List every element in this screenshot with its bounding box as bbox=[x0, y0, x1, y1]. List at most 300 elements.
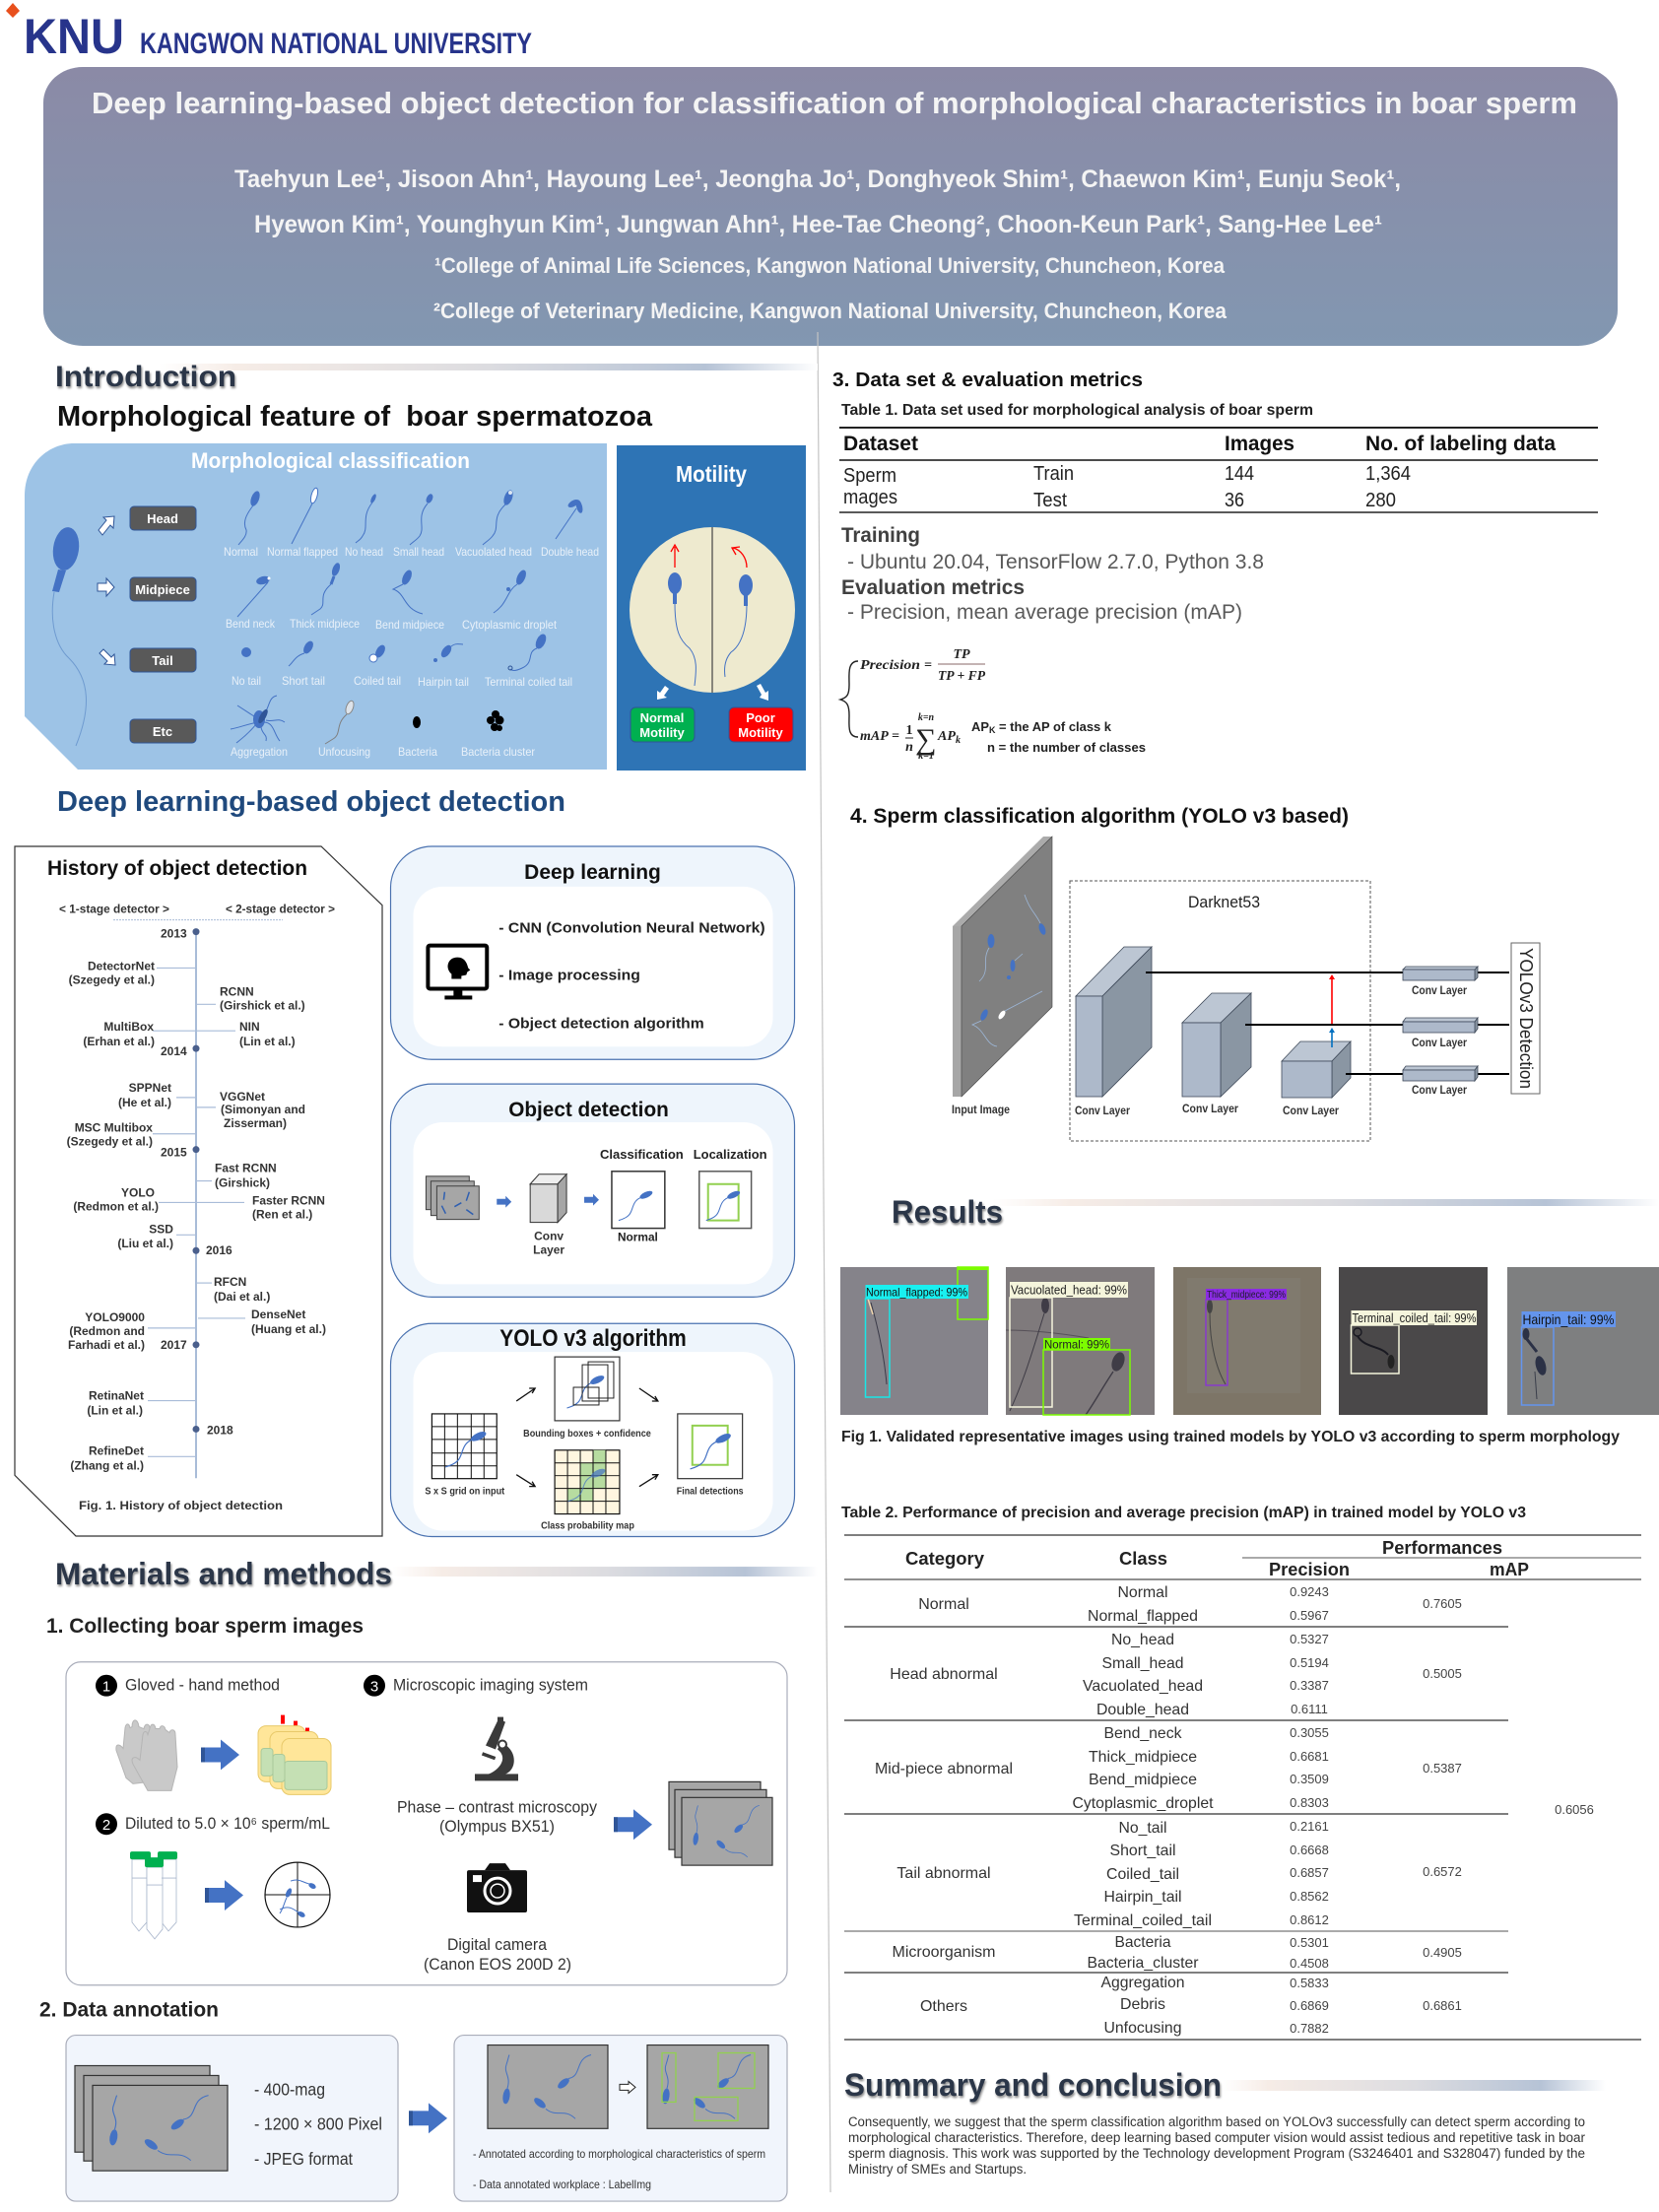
logo: Kangwon National University: KANGWON NATIONAL UNIVERSITY bbox=[140, 28, 532, 60]
class column: Vacuolated_head bbox=[1083, 1678, 1203, 1695]
class probability map bbox=[541, 1450, 634, 1531]
precision column: 0.8303 bbox=[1290, 1795, 1329, 1810]
grid on input bbox=[425, 1414, 505, 1498]
normal motility badge: Normal bbox=[640, 710, 684, 725]
image specs: - JPEG format bbox=[254, 2149, 353, 2169]
precision column bbox=[1290, 1584, 1329, 2036]
category column: Microorganism bbox=[893, 1944, 995, 1961]
affiliations bbox=[433, 253, 1228, 323]
mAP column: 0.5387 bbox=[1423, 1761, 1462, 1776]
formula: ∑ bbox=[915, 723, 936, 756]
training and evaluation text: - Ubuntu 20.04, TensorFlow 2.7.0, Python 3.8 bbox=[847, 551, 1264, 573]
etc labels: Aggregation bbox=[231, 745, 288, 759]
table 1: Images bbox=[1225, 433, 1294, 455]
step 2 label: Diluted to 5.0 × 10⁶ sperm/mL bbox=[125, 1814, 330, 1833]
conv layer labels: Conv Layer bbox=[1412, 983, 1467, 997]
authors: Taehyun Lee¹, Jisoon Ahn¹, Hayoung Lee¹, Jeongha Jo¹, Donghyeok Shim¹, Chaewon Kim¹, Eunju Seok¹, bbox=[234, 166, 1401, 193]
icon: conv cube bbox=[530, 1174, 566, 1223]
panel: image format bbox=[66, 2036, 398, 2201]
class column: Bend_neck bbox=[1103, 1725, 1182, 1742]
timeline entries: 1-stage: (Erhan et al.) bbox=[83, 1035, 155, 1048]
poor motility badge: Poor bbox=[746, 710, 775, 725]
etc labels: Bacteria cluster bbox=[461, 745, 535, 759]
tail labels: Hairpin tail bbox=[418, 675, 469, 689]
step 3 label: Microscopic imaging system bbox=[393, 1676, 588, 1695]
precision column: 0.6857 bbox=[1290, 1865, 1329, 1880]
precision column: 0.5301 bbox=[1290, 1935, 1329, 1950]
precision column: 0.3387 bbox=[1290, 1678, 1329, 1693]
table 1: No. of labeling data bbox=[1365, 433, 1556, 455]
timeline entries: 2-stage: NIN bbox=[239, 1020, 260, 1034]
summary text: sperm diagnosis. This work was supported by the Technology development Program (S3246401 and S328047) funded by the bbox=[848, 2146, 1585, 2161]
precision column: 0.8562 bbox=[1290, 1889, 1329, 1904]
table header: Category bbox=[905, 1549, 984, 1569]
timeline entries: 1-stage: (Redmon et al.) bbox=[73, 1199, 159, 1213]
normal motility badge bbox=[630, 707, 695, 742]
logo: Kangwon National University: KNU bbox=[24, 9, 124, 64]
poor motility badge: Motility bbox=[738, 725, 784, 740]
precision column: 0.8612 bbox=[1290, 1912, 1329, 1927]
panel: deep learning bbox=[391, 846, 795, 1059]
formula: K bbox=[989, 725, 996, 735]
midpiece morphologies bbox=[237, 562, 528, 617]
timeline entries: 1-stage: SPPNet bbox=[129, 1081, 171, 1095]
category labels: Etc bbox=[153, 724, 172, 739]
table 1 caption: Table 1. Data set used for morphological analysis of boar sperm bbox=[841, 402, 1313, 419]
class column: Normal bbox=[1117, 1584, 1168, 1601]
timeline entries: 2-stage: VGGNet bbox=[220, 1090, 265, 1104]
title panel bbox=[43, 67, 1618, 346]
labels: Classification bbox=[600, 1147, 684, 1162]
timeline entries: 2-stage: (Girshick et al.) bbox=[220, 998, 305, 1012]
timeline entries: 2-stage: (Simonyan and bbox=[221, 1103, 305, 1116]
midpiece labels: Bend midpiece bbox=[375, 618, 444, 632]
head labels: Double head bbox=[541, 545, 599, 559]
formula: k bbox=[956, 735, 961, 746]
stage labels: < 1-stage detector > bbox=[59, 903, 169, 916]
figure 1 caption: Fig 1. Validated representative images using trained models by YOLO v3 according to sperm morphology bbox=[841, 1429, 1620, 1445]
arrow bbox=[205, 1880, 243, 1910]
tail labels: No tail bbox=[232, 674, 261, 688]
step 1 label: 1 bbox=[102, 1679, 110, 1696]
step 1 label bbox=[96, 1675, 280, 1697]
table 2 bbox=[844, 1535, 1641, 2040]
mAP column: 0.5005 bbox=[1423, 1666, 1462, 1681]
result image: hairpin tail: Hairpin_tail: 99% bbox=[1523, 1311, 1614, 1327]
timeline axis: 2013 bbox=[161, 927, 187, 941]
mAP column: 0.6056 bbox=[1555, 1802, 1594, 1817]
panel title: Motility bbox=[676, 461, 747, 487]
icon: semen bags bbox=[258, 1715, 331, 1794]
panel: object detection bbox=[391, 1084, 795, 1297]
output blocks bbox=[1403, 967, 1478, 1081]
heading: Results: Results bbox=[892, 1194, 1003, 1230]
summary text: Ministry of SMEs and Startups. bbox=[848, 2162, 1027, 2177]
formula: AP bbox=[971, 719, 989, 734]
training and evaluation text: Evaluation metrics bbox=[841, 576, 1025, 599]
category labels: Head bbox=[147, 511, 178, 526]
head labels: Normal bbox=[224, 545, 258, 559]
etc labels bbox=[231, 745, 535, 759]
bullet list bbox=[498, 920, 765, 1032]
formula: n bbox=[905, 740, 913, 755]
panel: collecting boar sperm images bbox=[66, 1662, 787, 1985]
midpiece labels: Cytoplasmic droplet bbox=[462, 618, 558, 632]
authors: Hyewon Kim¹, Younghyun Kim¹, Jungwan Ahn¹, Hee-Tae Cheong², Choon-Keun Park¹, Sang-Hee Lee¹ bbox=[254, 211, 1382, 238]
diagram: YOLO v3 architecture bbox=[952, 837, 1540, 1141]
timeline entries: 1-stage: SSD bbox=[149, 1222, 173, 1236]
class column: Bacteria bbox=[1115, 1934, 1171, 1951]
precision column: 0.3509 bbox=[1290, 1772, 1329, 1786]
timeline entries: 2-stage bbox=[214, 984, 326, 1336]
label: conv layer: Conv bbox=[534, 1230, 564, 1243]
timeline entries: 2-stage: (Dai et al.) bbox=[214, 1290, 270, 1304]
precision column: 0.5194 bbox=[1290, 1655, 1329, 1670]
arrow bbox=[584, 1194, 599, 1206]
icon: tubes bbox=[130, 1851, 177, 1939]
timeline axis: 2014 bbox=[161, 1044, 187, 1058]
table 1 bbox=[839, 428, 1598, 512]
class column: Bacteria_cluster bbox=[1088, 1955, 1199, 1972]
final detections: Final detections bbox=[677, 1487, 744, 1498]
step 1 label: Gloved - hand method bbox=[125, 1676, 280, 1695]
result image: vacuolated head: Vacuolated_head: 99% bbox=[1011, 1283, 1127, 1297]
detection box bbox=[1511, 943, 1540, 1094]
summary text bbox=[848, 2114, 1586, 2177]
class column: Bend_midpiece bbox=[1089, 1772, 1197, 1788]
grid on input: S x S grid on input bbox=[425, 1487, 505, 1498]
image stack bbox=[426, 1176, 479, 1220]
stage labels: < 2-stage detector > bbox=[226, 903, 335, 916]
arrow bbox=[497, 1196, 511, 1208]
raw image bbox=[488, 2045, 608, 2128]
timeline axis: 2015 bbox=[161, 1146, 187, 1160]
panel title: YOLO v3 algorithm bbox=[499, 1325, 687, 1352]
precision column: 0.9243 bbox=[1290, 1584, 1329, 1599]
icon: gloves bbox=[116, 1720, 177, 1790]
table 1: 1,364 bbox=[1365, 463, 1411, 485]
heading: Materials and methods: Materials and methods bbox=[55, 1556, 392, 1591]
timeline entries: 1-stage: MSC Multibox bbox=[75, 1121, 153, 1135]
timeline entries: 1-stage: MultiBox bbox=[103, 1020, 154, 1034]
precision column: 0.6681 bbox=[1290, 1749, 1329, 1764]
title: Deep learning-based object detection for classification of morphological characteristics in boar sperm bbox=[92, 86, 1577, 120]
formula: TP + FP bbox=[938, 669, 985, 684]
formula: TP bbox=[953, 647, 970, 662]
category column bbox=[875, 1596, 1013, 2015]
timeline axis: 2016 bbox=[206, 1243, 232, 1257]
flow arrows bbox=[516, 1388, 658, 1487]
timeline entries: 1-stage: YOLO9000 bbox=[85, 1310, 145, 1324]
annotation notes: - Data annotated workplace : LabelImg bbox=[473, 2178, 651, 2191]
input image plate: Input Image bbox=[952, 1103, 1010, 1116]
class column: No_tail bbox=[1119, 1820, 1166, 1837]
arrow bbox=[614, 1809, 652, 1840]
result image: normal flapped: Normal_flapped: 99% bbox=[866, 1285, 967, 1299]
subheading: collecting images: 1. Collecting boar sperm images bbox=[46, 1615, 364, 1638]
table 2 caption: Table 2. Performance of precision and average precision (mAP) in trained model by YOLO v3 bbox=[841, 1505, 1526, 1521]
mAP column: 0.7605 bbox=[1423, 1596, 1462, 1611]
detection box: YOLOv3 Detection bbox=[1516, 948, 1536, 1089]
formula: mAP bbox=[860, 729, 889, 744]
timeline entries: 2-stage: RCNN bbox=[220, 984, 254, 998]
etc labels: Unfocusing bbox=[318, 745, 370, 759]
darknet53 box bbox=[1070, 881, 1370, 1141]
bounding boxes bbox=[523, 1357, 651, 1440]
precision column: 0.5967 bbox=[1290, 1608, 1329, 1623]
authors bbox=[234, 166, 1401, 238]
class column: Terminal_coiled_tail bbox=[1074, 1912, 1212, 1929]
subheading: sperm classification algorithm: 4. Sperm classification algorithm (YOLO v3 based) bbox=[850, 805, 1349, 828]
image specs: - 400-mag bbox=[254, 2079, 325, 2099]
category column: Head abnormal bbox=[890, 1666, 998, 1683]
poor motility badge bbox=[729, 707, 793, 742]
training and evaluation text: Training bbox=[841, 524, 920, 547]
conv layer labels: Conv Layer bbox=[1412, 1036, 1467, 1049]
mAP column bbox=[1423, 1596, 1594, 2013]
mAP column: 0.4905 bbox=[1423, 1945, 1462, 1960]
precision column: 0.2161 bbox=[1290, 1819, 1329, 1834]
head labels: Vacuolated head bbox=[455, 545, 532, 559]
table 1: Train bbox=[1033, 463, 1074, 485]
midpiece labels: Thick midpiece bbox=[290, 617, 360, 631]
class column: Unfocusing bbox=[1103, 2020, 1182, 2037]
timeline entries: 1-stage: (Zhang et al.) bbox=[70, 1458, 144, 1472]
category labels: Tail bbox=[152, 653, 173, 668]
head labels: Small head bbox=[393, 545, 444, 559]
bullet list: - Image processing bbox=[498, 968, 640, 984]
section: materials and methods bbox=[39, 1556, 818, 2201]
etc morphologies bbox=[231, 696, 504, 744]
class column: Coiled_tail bbox=[1106, 1866, 1179, 1883]
timeline entries: 1-stage bbox=[67, 959, 173, 1472]
timeline axis: 2018 bbox=[207, 1423, 233, 1437]
result image: normal flapped bbox=[840, 1267, 988, 1415]
precision column: 0.6111 bbox=[1291, 1702, 1328, 1716]
precision column: 0.7882 bbox=[1290, 2021, 1329, 2036]
result image: vacuolated head bbox=[1006, 1267, 1155, 1415]
upsample arrows bbox=[1329, 974, 1335, 1047]
class column: Double_head bbox=[1096, 1702, 1189, 1718]
annotation notes: - Annotated according to morphological characteristics of sperm bbox=[473, 2147, 765, 2161]
class probability map: Class probability map bbox=[541, 1520, 634, 1531]
mAP column: 0.6861 bbox=[1423, 1998, 1462, 2013]
label: conv layer: Layer bbox=[533, 1243, 564, 1257]
bullet list: - CNN (Convolution Neural Network) bbox=[498, 920, 765, 937]
panel title: History of object detection bbox=[47, 857, 307, 880]
class column: Debris bbox=[1120, 1996, 1165, 2013]
heading: Materials and methods bbox=[55, 1556, 818, 1591]
training and evaluation text bbox=[841, 524, 1264, 624]
table header: Performances bbox=[1382, 1538, 1502, 1558]
table 1: mages bbox=[843, 487, 897, 508]
bullet list: - Object detection algorithm bbox=[498, 1015, 704, 1032]
timeline entries: 1-stage: RefineDet bbox=[89, 1443, 144, 1457]
category labels: Midpiece bbox=[135, 582, 190, 597]
stage labels bbox=[59, 903, 335, 916]
affiliations: ¹College of Animal Life Sciences, Kangwon National University, Chuncheon, Korea bbox=[434, 253, 1226, 278]
formula: n = the number of classes bbox=[987, 740, 1146, 755]
conv layer labels: Conv Layer bbox=[1182, 1102, 1238, 1115]
text: digital camera: Digital camera bbox=[447, 1935, 548, 1954]
result image: vacuolated head: Normal: 99% bbox=[1044, 1338, 1109, 1352]
panel title: Object detection bbox=[508, 1099, 669, 1121]
timeline entries: 2-stage: Faster RCNN bbox=[252, 1193, 325, 1207]
formula: = bbox=[924, 658, 932, 673]
conv layers bbox=[1076, 947, 1351, 1098]
heading: Introduction bbox=[55, 361, 818, 393]
timeline entries: 2-stage: DenseNet bbox=[251, 1307, 305, 1321]
conv layer labels: Conv Layer bbox=[1075, 1104, 1130, 1117]
category labels bbox=[130, 506, 196, 743]
heading: Results bbox=[892, 1194, 1659, 1230]
darknet53 box: Darknet53 bbox=[1188, 893, 1260, 911]
class column: Short_tail bbox=[1109, 1843, 1176, 1859]
text: phase contrast microscopy bbox=[397, 1797, 597, 1836]
table header bbox=[905, 1538, 1529, 1579]
text: phase contrast microscopy: (Olympus BX51) bbox=[439, 1817, 555, 1836]
panel: motility bbox=[617, 445, 806, 771]
step 2 label: 2 bbox=[102, 1817, 110, 1834]
conv layer labels: Conv Layer bbox=[1283, 1104, 1339, 1117]
timeline entries: 1-stage: DetectorNet bbox=[88, 959, 155, 972]
timeline entries: 2-stage: (Huang et al.) bbox=[251, 1322, 326, 1336]
diagram: motility dish bbox=[630, 527, 795, 693]
tail labels bbox=[232, 674, 572, 689]
panel: morphological classification bbox=[25, 443, 607, 770]
class column: Thick_midpiece bbox=[1089, 1749, 1197, 1766]
arrow bbox=[409, 2103, 447, 2133]
timeline entries: 2-stage: RFCN bbox=[214, 1275, 246, 1289]
white arrows bbox=[657, 684, 768, 701]
bounding boxes: Bounding boxes + confidence bbox=[523, 1429, 651, 1440]
panel: annotation bbox=[454, 2036, 787, 2201]
heading: Deep learning-based object detection: Deep learning-based object detection bbox=[57, 786, 565, 818]
class column: Hairpin_tail bbox=[1103, 1889, 1182, 1906]
head labels: Normal flapped bbox=[267, 545, 338, 559]
result image: terminal coiled tail bbox=[1339, 1267, 1488, 1415]
result image: thick midpiece bbox=[1173, 1267, 1321, 1415]
class column: Small_head bbox=[1101, 1655, 1184, 1672]
localization box bbox=[699, 1172, 752, 1229]
formula: = bbox=[892, 729, 899, 744]
icon: microscope bbox=[475, 1717, 518, 1780]
class column: Normal_flapped bbox=[1088, 1608, 1198, 1625]
timeline connectors bbox=[148, 968, 245, 1456]
result image: thick midpiece: Thick_midpiece: 99% bbox=[1207, 1290, 1286, 1301]
formula: = the AP of class k bbox=[995, 719, 1112, 734]
timeline entries: 2-stage: (Ren et al.) bbox=[252, 1207, 312, 1221]
tail labels: Terminal coiled tail bbox=[485, 675, 572, 689]
conv layer labels: Conv Layer bbox=[1412, 1083, 1467, 1097]
mAP column: 0.6572 bbox=[1423, 1864, 1462, 1879]
head labels bbox=[224, 545, 599, 559]
normal motility badge: Motility bbox=[639, 725, 686, 740]
head labels: No head bbox=[345, 545, 383, 559]
image stack bbox=[669, 1781, 772, 1865]
precision column: 0.4508 bbox=[1290, 1956, 1329, 1971]
timeline entries: 2-stage: Zisserman) bbox=[224, 1116, 287, 1130]
table 1: Sperm bbox=[843, 465, 896, 487]
formula: Precision bbox=[860, 658, 920, 673]
panel: YOLO v3 algorithm bbox=[391, 1323, 795, 1536]
table 1: Test bbox=[1033, 490, 1067, 511]
precision column: 0.6668 bbox=[1290, 1843, 1329, 1857]
icon: large sperm bbox=[50, 525, 86, 746]
training and evaluation text: - Precision, mean average precision (mAP) bbox=[847, 601, 1242, 624]
panel title: Deep learning bbox=[524, 861, 661, 884]
formula: k=n bbox=[918, 712, 935, 723]
classification box: Normal bbox=[618, 1231, 658, 1244]
conv layer labels bbox=[1075, 983, 1467, 1117]
timeline entries: 1-stage: (Redmon and bbox=[69, 1324, 145, 1338]
category column: Others bbox=[920, 1998, 967, 2015]
result image: terminal coiled tail: Terminal_coiled_tail: 99% bbox=[1352, 1311, 1476, 1325]
heading: Morphological feature: Morphological feature of boar spermatozoa bbox=[57, 401, 653, 433]
arrow bbox=[201, 1740, 239, 1770]
icon: camera bbox=[467, 1863, 527, 1912]
summary text: morphological characteristics. Therefore, deep learning based computer vision would assist tedious and repetitive task in boar bbox=[848, 2130, 1586, 2145]
figure caption: Fig. 1. History of object detection bbox=[79, 1499, 283, 1512]
labels bbox=[600, 1147, 767, 1162]
image stack bbox=[75, 2065, 228, 2171]
image specs: - 1200 × 800 Pixel bbox=[254, 2113, 382, 2133]
precision column: 0.6869 bbox=[1290, 1998, 1329, 2013]
summary text: Consequently, we suggest that the sperm classification algorithm based on YOLOv3 successfully can detect sperm according to bbox=[848, 2114, 1585, 2129]
input image plate bbox=[952, 837, 1052, 1116]
text: digital camera bbox=[424, 1935, 571, 1974]
timeline entries: 1-stage: (Szegedy et al.) bbox=[67, 1135, 153, 1149]
class column: Cytoplasmic_droplet bbox=[1072, 1795, 1214, 1812]
heading: Summary and conclusion bbox=[844, 2067, 1606, 2103]
heading: Introduction: Introduction bbox=[55, 361, 236, 393]
icon: counting field bbox=[265, 1862, 330, 1927]
outlined arrow bbox=[620, 2081, 635, 2093]
formula: k=1 bbox=[918, 751, 934, 762]
table 1: 144 bbox=[1225, 463, 1254, 485]
category column: Mid-piece abnormal bbox=[875, 1761, 1013, 1777]
subheading: data set and evaluation metrics: 3. Data set & evaluation metrics bbox=[832, 369, 1143, 391]
timeline entries: 1-stage: (Liu et al.) bbox=[117, 1237, 173, 1250]
timeline entries: 1-stage: Farhadi et al.) bbox=[68, 1338, 145, 1352]
affiliations: ²College of Veterinary Medicine, Kangwon National University, Chuncheon, Korea bbox=[433, 299, 1228, 323]
timeline entries: 1-stage: (Lin et al.) bbox=[87, 1404, 143, 1418]
formula: 1 bbox=[906, 723, 912, 738]
timeline entries: 2-stage: Fast RCNN bbox=[215, 1162, 277, 1175]
precision column: 0.5327 bbox=[1290, 1632, 1329, 1646]
formula bbox=[840, 647, 1146, 762]
timeline entries: 1-stage: (Szegedy et al.) bbox=[69, 972, 155, 986]
class column: Aggregation bbox=[1101, 1975, 1184, 1991]
panel: history of object detection bbox=[15, 846, 382, 1536]
timeline entries: 2-stage: (Girshick) bbox=[215, 1176, 270, 1189]
table header: mAP bbox=[1490, 1560, 1529, 1579]
result image: hairpin tail bbox=[1507, 1267, 1659, 1415]
label: conv layer bbox=[533, 1230, 564, 1257]
text: phase contrast microscopy: Phase – contrast microscopy bbox=[397, 1797, 597, 1816]
step 3 label: 3 bbox=[370, 1679, 378, 1696]
labels: Localization bbox=[694, 1147, 767, 1162]
precision column: 0.5833 bbox=[1290, 1976, 1329, 1990]
subheading: data annotation: 2. Data annotation bbox=[39, 1999, 219, 2022]
image specs bbox=[254, 2079, 382, 2169]
precision column: 0.3055 bbox=[1290, 1725, 1329, 1740]
class column bbox=[1072, 1584, 1214, 2037]
tail labels: Coiled tail bbox=[354, 674, 401, 688]
icon: white arrows bbox=[98, 516, 115, 665]
timeline entries: 1-stage: (He et al.) bbox=[118, 1096, 171, 1109]
connection lines bbox=[1146, 972, 1509, 1074]
